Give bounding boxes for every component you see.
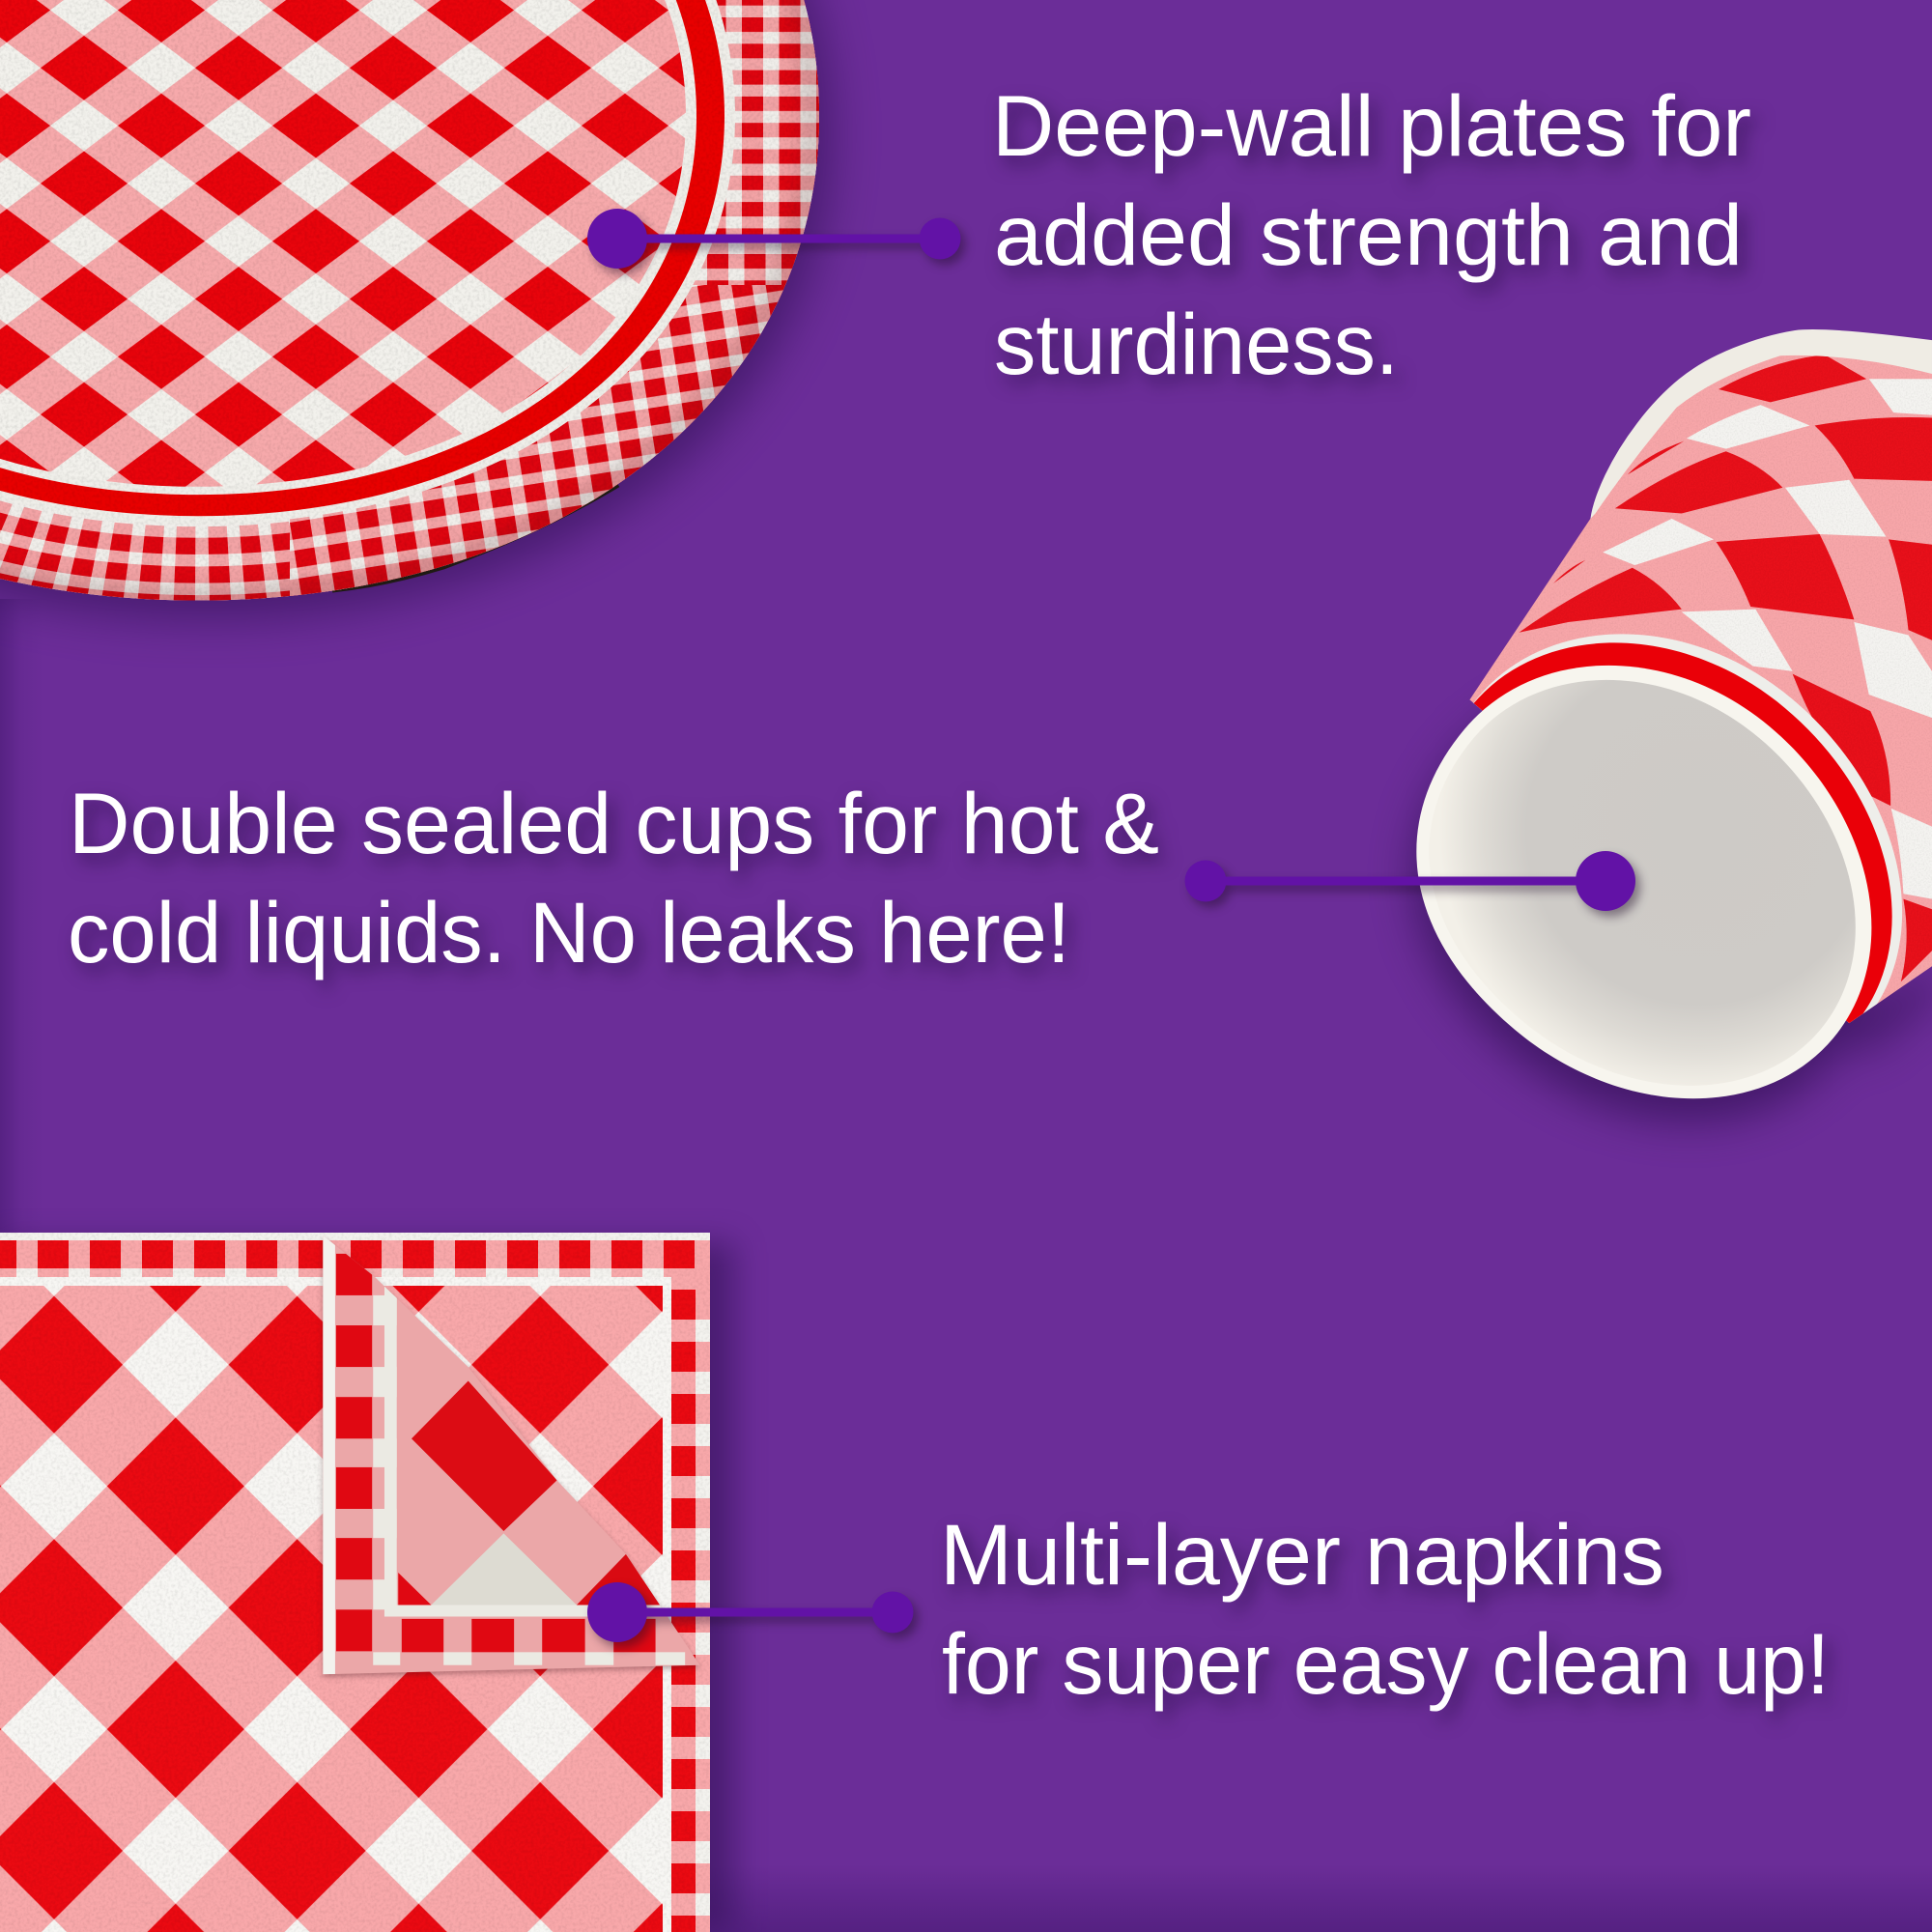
panel: napkin [0,1226,734,1932]
cup base rim [1337,578,1932,1190]
napkin base sheet [0,1233,710,1932]
callout: napkin pointer [587,1582,914,1642]
text block: cups [68,775,1159,980]
text block: napkins: for super easy clean up! [942,1615,1830,1712]
napkin gingham border [0,1240,710,1932]
napkin field: diagonal gingham [0,1286,663,1932]
cup base disc [1354,597,1932,1172]
cup body gingham [1470,355,1932,1023]
napkin white inner border [0,1277,671,1932]
flap white edge [323,1226,335,1684]
cup thin white band [1473,634,1903,1024]
flap inner checks [412,1380,557,1531]
text block: plates [992,77,1751,392]
flap red squares [336,1254,656,1652]
text block: plates: sturdiness. [994,296,1399,392]
cup red band [1474,642,1892,1024]
callout: plate pointer [587,209,960,269]
text block: napkins [940,1506,1830,1712]
flap inner stripes [373,1277,699,1665]
plate inner white ring [0,0,696,495]
text block: cups: cold liquids. No leaks here! [68,884,1070,980]
cup rim [1590,329,1932,519]
cup bands clipped to body [1473,634,1903,1024]
text block: plates: added strength and [994,186,1743,283]
plate rim: small gingham checks [0,0,819,601]
panel: paper cup [1395,329,1932,1140]
plate red ring [0,0,724,516]
text block: cups: Double sealed cups for hot & [69,775,1159,871]
plate outer white ring [0,0,735,525]
napkin folded corner [316,1226,710,1684]
callout: cup pointer [1184,851,1635,911]
panel: paper plate [0,0,850,638]
text block: napkins: Multi-layer napkins [940,1506,1664,1603]
text block: plates: Deep-wall plates for [992,77,1751,174]
plate centre: diagonal gingham [0,0,686,487]
